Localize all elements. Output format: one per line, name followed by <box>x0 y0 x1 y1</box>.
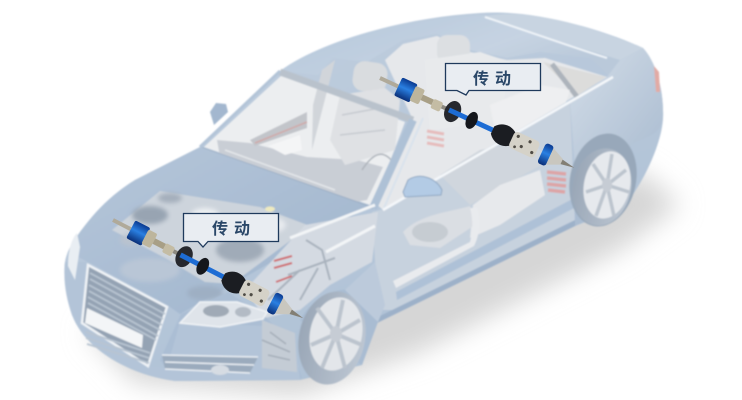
door trim seen through windshield <box>250 112 307 155</box>
callout: front drive label: 动 <box>234 220 250 238</box>
fog lamp <box>211 365 229 375</box>
rear floor detail <box>440 140 550 205</box>
side window frame line <box>383 77 613 210</box>
callout: rear drive label <box>446 64 540 95</box>
front seat base through door <box>403 206 475 248</box>
drive shaft: rear <box>375 68 579 178</box>
left headlight <box>68 233 80 280</box>
windshield interior <box>204 75 405 206</box>
rear seat <box>490 85 570 135</box>
licence plate <box>85 308 143 348</box>
lower bumper intake <box>162 355 258 373</box>
right A pillar <box>373 120 413 208</box>
grille <box>82 265 167 366</box>
callout: front drive label <box>184 214 278 247</box>
roof panel <box>280 15 620 77</box>
door window region below sill line <box>372 78 607 310</box>
windshield header <box>280 72 413 120</box>
callout: rear drive label: 动 <box>495 70 511 88</box>
dashboard <box>217 140 383 205</box>
left mirror <box>210 103 228 125</box>
front fender <box>160 292 302 381</box>
rear quarter panel <box>570 48 663 170</box>
ground shadow <box>85 170 680 396</box>
hood <box>68 147 373 314</box>
door sill strip <box>393 208 479 288</box>
engine bay <box>112 191 310 284</box>
callout: rear drive label: 传 <box>473 70 489 88</box>
right headlight <box>180 302 267 327</box>
tail light <box>654 66 660 92</box>
front wheel <box>290 285 374 391</box>
callout: front drive label: 传 <box>212 220 228 238</box>
red coils front <box>274 256 292 282</box>
rear suspension spring <box>547 172 566 192</box>
drive shaft: front <box>108 210 308 328</box>
front passenger seat <box>330 60 400 170</box>
cabin behind B pillar <box>372 36 607 210</box>
driver seat <box>425 35 510 130</box>
side mirror <box>403 176 442 197</box>
body shell <box>64 12 663 381</box>
rear side glass <box>543 62 606 96</box>
windshield base frame <box>202 148 373 208</box>
rear wheel <box>566 143 638 231</box>
rear wheel arch <box>561 127 645 233</box>
car body <box>64 12 663 391</box>
windshield left pillar <box>200 71 280 147</box>
rear deck <box>482 14 643 60</box>
washer cap <box>265 206 275 212</box>
lower front intake detail <box>262 320 297 372</box>
rear seat cushion through door <box>470 170 545 238</box>
pillar between seats <box>312 60 335 150</box>
bumper <box>64 262 300 381</box>
strut tower and engine parts <box>245 212 378 318</box>
middle suspension spring <box>427 131 444 146</box>
